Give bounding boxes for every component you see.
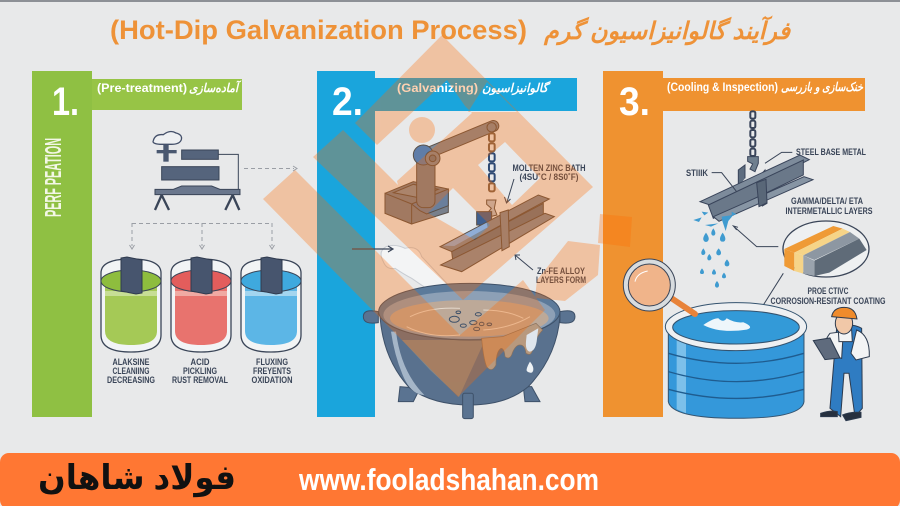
step 1 colour column [32,71,92,417]
step 1 number: 1. [52,80,79,124]
dashed flow arrows [130,166,297,249]
label: alkaline cleaning: DECREASING [107,375,155,386]
label: alloy layers: Zn-FE ALLOY [537,266,586,277]
step 1 header: (Pre-treatment) [97,81,187,95]
label: molten zinc bath: MOLTEN ZINC BATH [512,163,586,174]
step 2 number: 2. [332,80,363,124]
step 1 header [92,79,242,110]
label: protective coating: PROE CTIVC [808,286,849,297]
step 3 header: خنک‌سازی و بازرسی [781,80,863,95]
website: www.fooladshahan.com [298,462,599,497]
icon: workbench and hoist [153,132,240,210]
panel: step 1 pre-treatment [32,71,301,417]
panel: step 3 cooling and inspection [598,71,886,421]
droplets [693,212,737,288]
coating layers magnified [783,221,869,277]
label: alkaline cleaning: ALAKSINE [112,357,150,368]
step 1 header: آماده‌سازی [189,80,241,96]
step 3 number: 3. [619,80,650,124]
tank: fluxing [241,257,301,352]
step 3 header [663,78,865,111]
arrow: alloy layers [515,255,533,270]
watermark square on orange column [598,214,632,247]
title: فرآیند گالوانیزاسیون گرم [543,15,792,46]
step 3 colour column [603,71,663,417]
tank: alkaline cleaning [101,257,161,352]
label: acid pickling: PICKLING [183,366,217,377]
brand name: فولاد شاهان [38,459,236,498]
label: acid pickling: ACID [190,357,210,368]
label: acid pickling: RUST REMOVAL [172,375,228,386]
label: stink: STIIIK [686,168,708,179]
step 3 header: (Cooling & Inspection) [667,80,778,94]
label: intermetallic layers: INTERMETALLIC LAYERS [786,206,872,217]
inspector worker [813,307,869,421]
label: fluxing [252,357,293,386]
title: (Hot-Dip Galvanization Process) [110,15,527,45]
step 2 header: گالوانیزاسیون [482,80,551,96]
illustration: cooling beam and tank [623,111,869,421]
step 2 header [375,78,577,111]
label: fluxing: FREYENTS [253,366,291,377]
label: fluxing: FLUXING [256,357,288,368]
label: protective coating [770,286,886,307]
label: alloy layers [536,266,586,286]
arrow: molten zinc bath [504,179,514,203]
label: alkaline cleaning: CLEANIING [112,366,150,377]
label: molten zinc bath [512,163,586,183]
tank [665,303,807,418]
tank: acid pickling [171,257,231,352]
illustration: zinc kettle [363,245,575,419]
panel: step 2 galvanizing [263,35,600,419]
title [110,15,792,46]
label: acid pickling [172,357,228,386]
footer bar [0,453,900,506]
label: alloy layers: LAYERS FORM [536,275,586,286]
brown covered kettle body [402,340,485,397]
logo watermark [263,35,600,397]
label: fluxing: OXIDATION [252,375,293,386]
label: intermetallic layers [786,196,872,217]
label: molten zinc bath: (4SU˚C / 8S0˚F) [520,172,578,183]
illustration: crane and beam [385,123,554,272]
label: steel base metal: STEEL BASE METAL [796,147,866,158]
panel: step 1 pre-treatment: PERF PEATION [40,138,66,217]
label: alkaline cleaning [107,357,155,386]
step 2 colour column [317,71,375,417]
chain and beam [700,111,813,221]
arrow: immersion [352,246,393,252]
label: intermetallic layers: GAMMA/DELTA/ ETA [791,196,863,207]
leader lines [712,152,792,305]
magnifier [623,259,695,314]
step 2 header: (Galvanizing) [397,81,478,95]
